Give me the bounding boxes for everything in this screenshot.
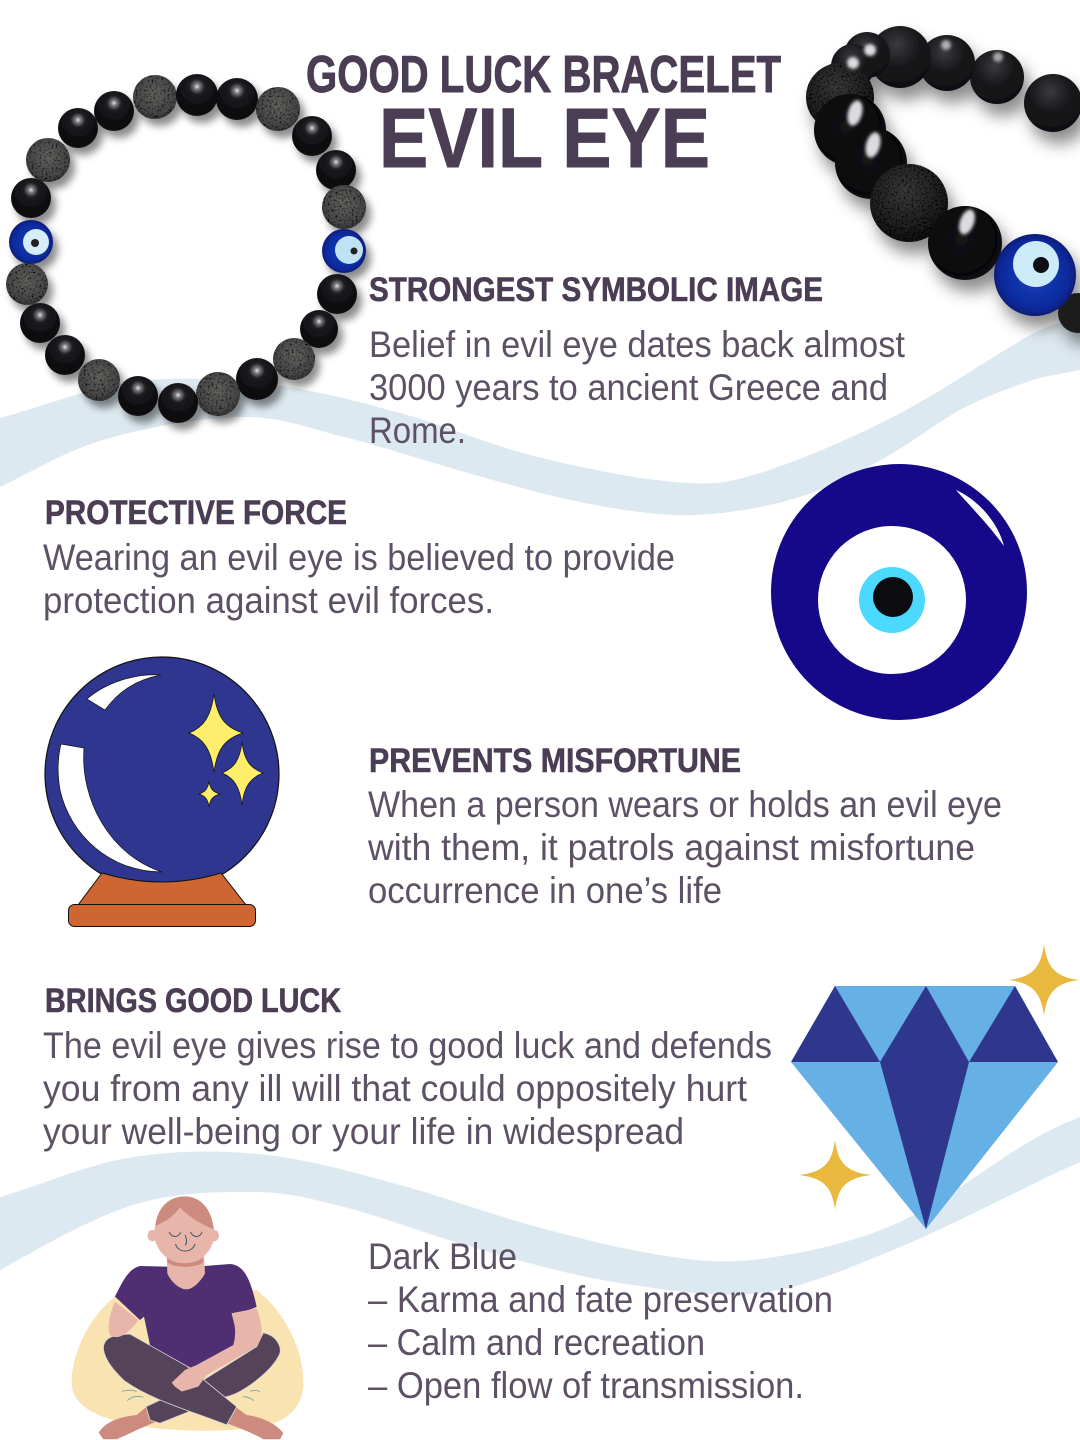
body text: protection against evil forces. <box>43 580 494 621</box>
body text: Rome. <box>369 410 466 451</box>
section: brings good luck <box>43 982 772 1152</box>
body text <box>369 324 906 451</box>
body text: Wearing an evil eye is believed to provide <box>43 537 675 578</box>
hair <box>155 1196 214 1229</box>
list title: Dark Blue <box>368 1236 517 1277</box>
grass strokes <box>122 1390 260 1401</box>
body text: occurrence in one’s life <box>368 870 722 911</box>
body text: 3000 years to ancient Greece and <box>369 367 888 408</box>
right arm and hand <box>172 1308 262 1392</box>
background wave: lower <box>0 1117 1080 1295</box>
stand base <box>68 904 256 926</box>
section: prevents misfortune <box>367 742 1002 911</box>
body text <box>43 537 675 621</box>
title <box>306 46 781 185</box>
body text: your well-being or your life in widespread <box>43 1111 684 1152</box>
icon: evil eye <box>771 464 1027 720</box>
heading: PREVENTS MISFORTUNE <box>369 742 741 780</box>
feet <box>99 1407 283 1439</box>
heading: STRONGEST SYMBOLIC IMAGE <box>369 271 823 309</box>
list items: – Open flow of transmission. <box>368 1365 804 1406</box>
sparkle: top right <box>1009 944 1079 1016</box>
ears <box>148 1230 219 1241</box>
body text: you from any ill will that could oppositely hurt <box>43 1068 748 1109</box>
near leg <box>103 1334 237 1425</box>
body text <box>367 784 1002 911</box>
section: protective force <box>43 494 675 621</box>
section: dark blue list <box>368 1236 833 1406</box>
photo: round bead bracelet <box>6 74 366 423</box>
section: strongest symbolic image <box>369 271 906 451</box>
body text: The evil eye gives rise to good luck and defends <box>43 1025 772 1066</box>
body text <box>43 1025 772 1152</box>
list items: – Calm and recreation <box>368 1322 705 1363</box>
title line: good luck bracelet: GOOD LUCK BRACELET <box>306 46 781 104</box>
body text: with them, it patrols against misfortune <box>367 827 975 868</box>
bead highlights <box>845 40 1003 237</box>
head <box>154 1203 214 1263</box>
body text: When a person wears or holds an evil eye <box>368 784 1002 825</box>
background wave: upper <box>0 318 1080 515</box>
title line: evil eye: EVIL EYE <box>379 91 710 185</box>
sparkles <box>189 694 243 772</box>
list items: – Karma and fate preservation <box>368 1279 833 1320</box>
ball stand <box>78 873 246 905</box>
heading: PROTECTIVE FORCE <box>45 494 347 532</box>
heading: BRINGS GOOD LUCK <box>45 982 341 1020</box>
chin shadow <box>167 1258 203 1267</box>
shirt <box>115 1264 257 1368</box>
far leg <box>146 1333 280 1423</box>
body text: Belief in evil eye dates back almost <box>369 324 906 365</box>
icon: crystal ball <box>45 657 279 926</box>
ball highlights <box>58 744 162 872</box>
neck <box>167 1253 205 1289</box>
ball <box>45 657 279 891</box>
list items <box>368 1279 833 1406</box>
sparkle: bottom left <box>799 1140 871 1210</box>
left arm <box>109 1302 138 1337</box>
illustration: meditating person <box>72 1196 303 1439</box>
cushion <box>72 1290 303 1431</box>
face <box>169 1232 202 1251</box>
icon: diamond <box>791 944 1079 1229</box>
photo: close-up bracelet <box>806 26 1080 333</box>
